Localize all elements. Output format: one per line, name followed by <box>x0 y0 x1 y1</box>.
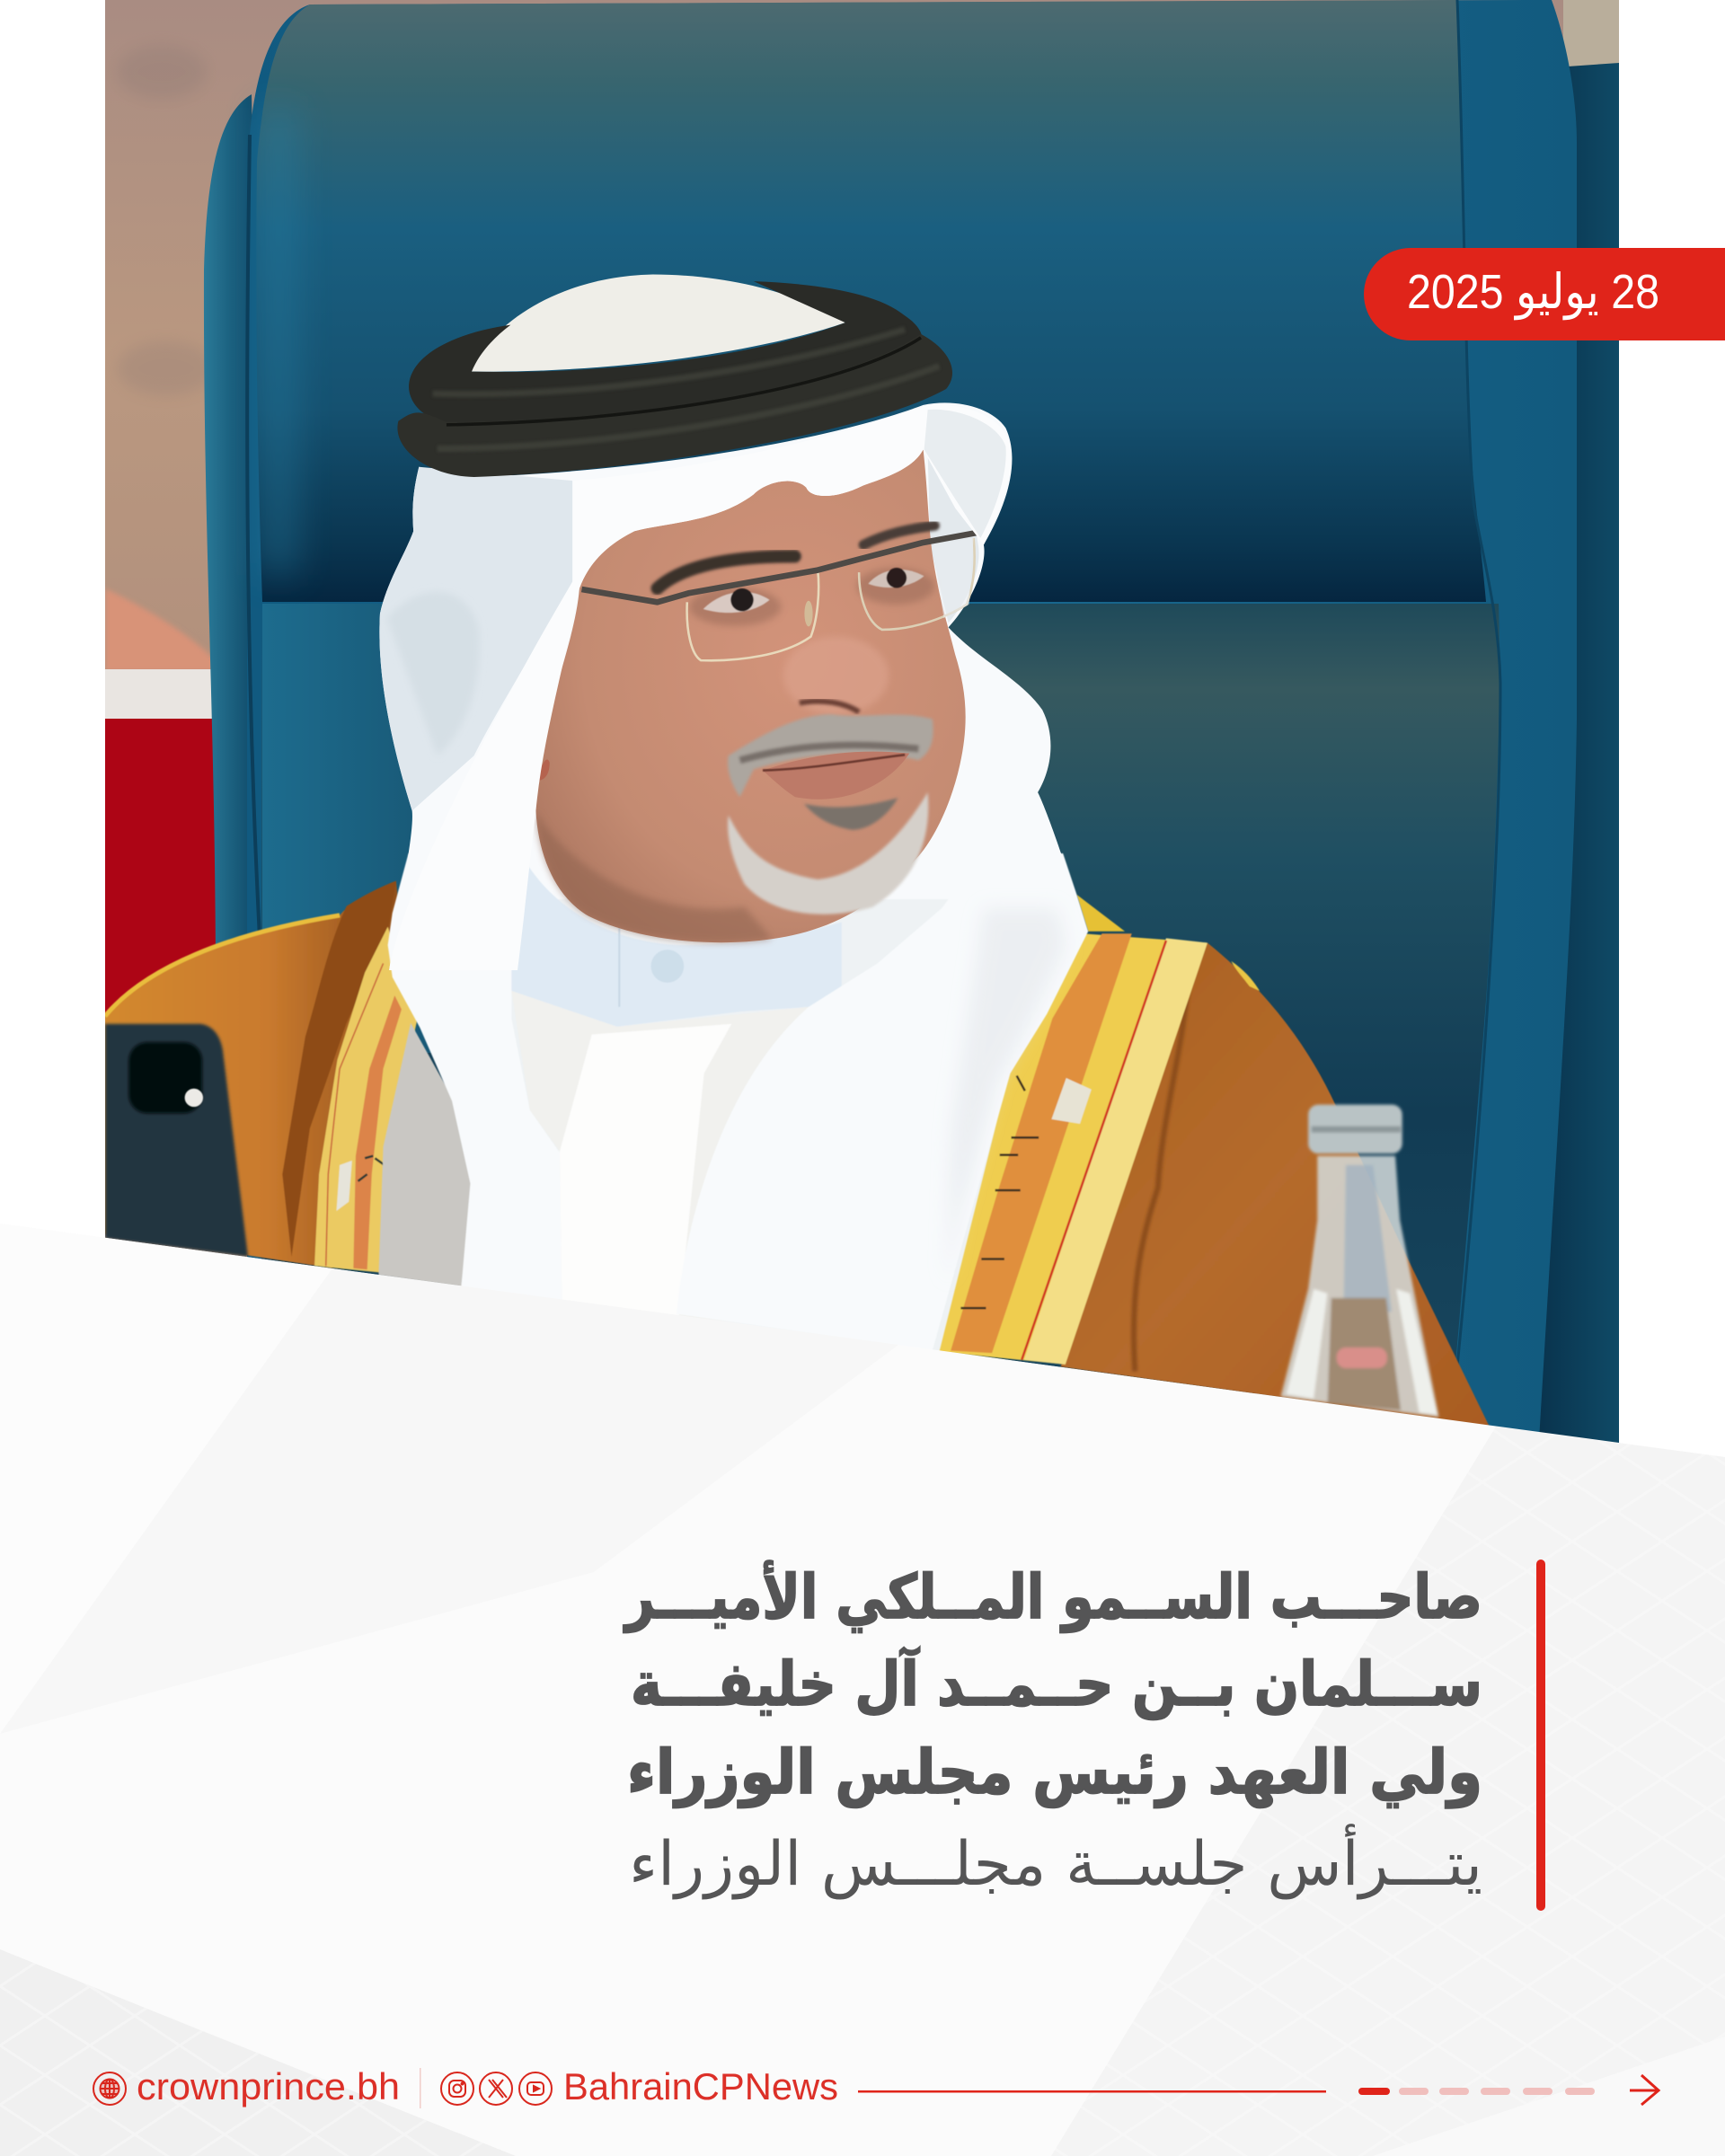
moustache <box>728 714 933 797</box>
collar <box>511 853 842 1027</box>
chair: top right background and side <box>1540 0 1619 1443</box>
background objects: hand, white strip and red block <box>105 588 217 1015</box>
front fold of scarf <box>389 405 1011 970</box>
grey inner fold <box>378 1023 473 1286</box>
date text: 28 يوليو 2025 <box>1407 265 1659 320</box>
ear hint <box>539 760 550 781</box>
water bottle <box>1280 1105 1439 1418</box>
heading: four Arabic lines: يتـــرأس جلســة مجلـــس الوزراء <box>629 1824 1482 1900</box>
chin beard <box>728 792 928 915</box>
nose <box>783 637 889 714</box>
rule line <box>858 2090 1326 2093</box>
heading: four Arabic lines: ولي العهد رئيس مجلس الوزراء <box>627 1737 1482 1808</box>
head scarf: outer silhouette <box>379 402 1078 970</box>
tablet <box>105 1024 248 1257</box>
left drape of head scarf <box>388 853 578 1305</box>
foreground: tablet and water bottle <box>105 1024 1439 1418</box>
website text: crownprince.bh <box>137 2065 400 2107</box>
face <box>535 449 966 942</box>
icon: globe <box>93 2072 126 2105</box>
lips <box>763 752 909 800</box>
accent bar beside heading <box>1536 1560 1545 1911</box>
eyebrows <box>658 556 795 588</box>
photo: portrait of the crown prince in a blue chair <box>105 0 1619 1455</box>
right drape <box>677 853 1088 1351</box>
cap <box>469 275 845 372</box>
robe left sleeve <box>105 881 402 1268</box>
handle text: BahrainCPNews <box>563 2065 838 2107</box>
heading: four Arabic lines: صاحـــب الســمو المــلكي الأميـــر <box>623 1560 1482 1633</box>
thobe shirt <box>511 991 809 1330</box>
soul patch <box>804 798 898 830</box>
left gold trim <box>314 927 418 1273</box>
photo background: blurred tan wall <box>105 0 1563 1258</box>
arrow <box>1630 2075 1659 2105</box>
date pill <box>1364 248 1725 340</box>
black head ring <box>397 281 952 477</box>
glasses <box>581 532 980 660</box>
panel facets <box>0 1224 332 1734</box>
panel: lower white diagonal section <box>0 1224 1725 2156</box>
heading: four Arabic lines <box>623 1560 1482 1900</box>
body: robe sleeves and gold trim <box>105 881 1490 1427</box>
eye socket shading <box>689 568 934 626</box>
right gold trim <box>1076 895 1125 932</box>
footer bar <box>93 2065 1659 2108</box>
icon: instagram <box>441 2072 473 2105</box>
icon: video play <box>519 2072 552 2105</box>
chair: left wing <box>203 94 252 945</box>
chair: main back and cushions <box>247 0 1577 1455</box>
head: face, glasses, beard, cap and ring <box>389 275 1011 970</box>
right robe sleeve <box>1061 942 1490 1427</box>
white backing <box>460 900 998 1351</box>
page indicator dashes <box>1358 2088 1595 2095</box>
chest: thobe, collar and scarf drapes <box>378 853 1088 1357</box>
icon: X <box>480 2072 512 2105</box>
heading: four Arabic lines: ســـلمان بــن حــمــد آل خليفـــة <box>631 1646 1482 1720</box>
eyes <box>703 568 924 613</box>
